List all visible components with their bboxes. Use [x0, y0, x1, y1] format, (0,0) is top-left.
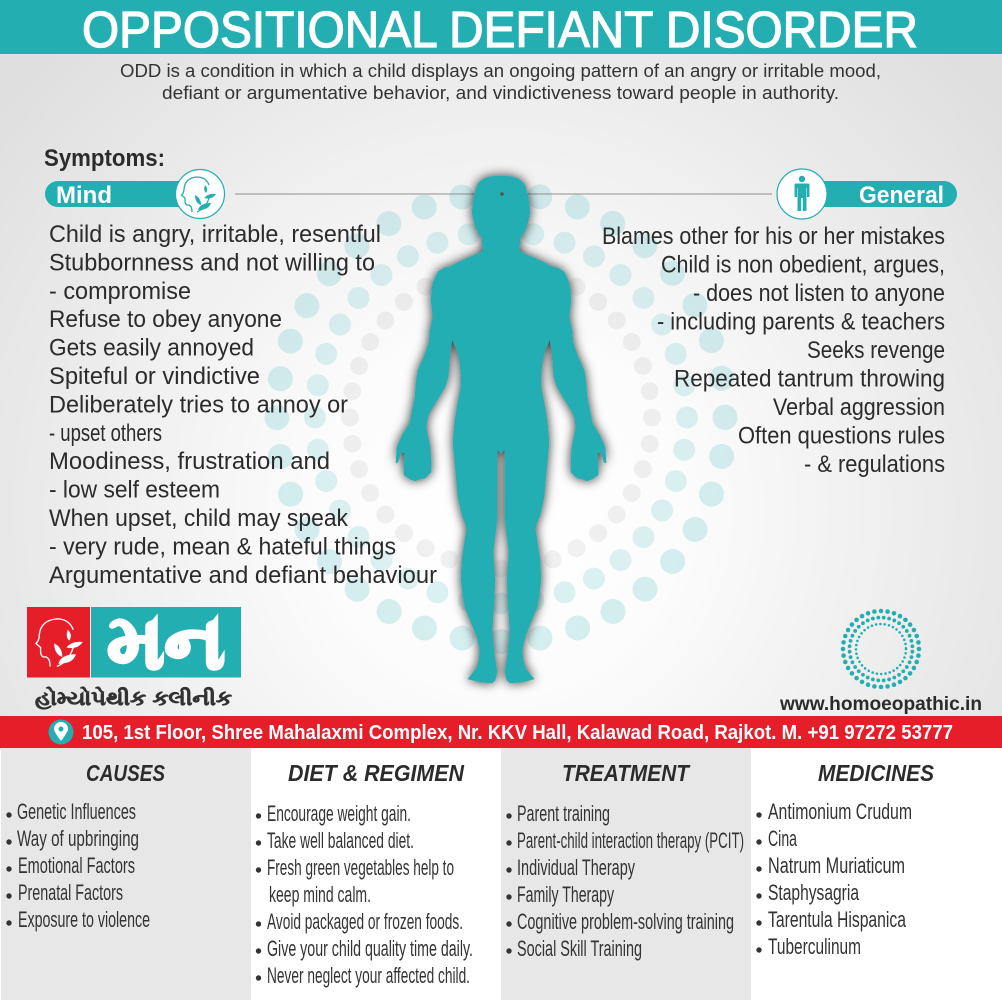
- panel: medicines: Antimonium Crudum: [768, 799, 912, 824]
- mind symptoms list: Moodiness, frustration and: [49, 448, 330, 475]
- mind symptoms list: - very rude, mean & hateful things: [49, 533, 396, 560]
- panel: diet and regimen: keep mind calm.: [269, 882, 371, 907]
- general symptoms list: Often questions rules: [738, 422, 945, 450]
- general symptoms list: Blames other for his or her mistakes: [602, 223, 945, 250]
- mind symptoms list: Child is angry, irritable, resentful: [49, 221, 381, 248]
- panel: medicines: Staphysagria: [768, 880, 860, 905]
- panel: treatment: Cognitive problem-solving training: [517, 909, 734, 934]
- website: www.homoeopathic.in: [779, 694, 982, 715]
- symptoms heading: Symptoms:: [44, 145, 165, 172]
- mind pill: Mind: [56, 182, 112, 209]
- general symptoms list: - including parents & teachers: [657, 308, 945, 336]
- general symptoms list: Child is non obedient, argues,: [661, 252, 945, 278]
- mind pill: [45, 170, 224, 218]
- icon: head with leaves, logo: [36, 619, 83, 666]
- panel: diet and regimen: DIET & REGIMEN: [288, 760, 464, 786]
- panel: medicines: [751, 748, 1002, 1000]
- clinic logo: મન: [107, 600, 225, 685]
- panel: medicines: Tuberculinum: [768, 934, 861, 959]
- panel: treatment: TREATMENT: [562, 760, 691, 786]
- dotted rings behind body: [277, 194, 725, 642]
- panel: causes: Way of upbringing: [17, 826, 139, 851]
- panel: diet and regimen: Encourage weight gain.: [267, 801, 411, 826]
- panel: medicines: Tarentula Hispanica: [768, 907, 907, 932]
- mind symptoms list: Refuse to obey anyone: [49, 306, 282, 333]
- intro text: ODD is a condition in which a child displays an ongoing pattern of an angry or irritable mood,: [120, 61, 881, 81]
- general symptoms list: [602, 223, 945, 478]
- head marker dot: [500, 192, 504, 196]
- intro text: defiant or argumentative behavior, and vindictiveness toward people in authority.: [162, 83, 839, 103]
- general symptoms list: Repeated tantrum throwing: [674, 366, 945, 392]
- panel: causes: [1, 748, 251, 1000]
- mind symptoms list: - low self esteem: [49, 477, 220, 504]
- panel: medicines: Cina: [768, 826, 797, 851]
- mind symptoms list: - compromise: [49, 278, 191, 305]
- intro text: [120, 61, 881, 103]
- mind symptoms list: Gets easily annoyed: [49, 335, 254, 362]
- panel: treatment: Family Therapy: [517, 882, 614, 907]
- mind symptoms list: Spiteful or vindictive: [49, 363, 260, 390]
- general symptoms list: Seeks revenge: [807, 337, 945, 364]
- mind symptoms list: Stubbornness and not willing to: [49, 249, 375, 276]
- title banner: OPPOSITIONAL DEFIANT DISORDER: [82, 1, 918, 58]
- mind symptoms list: [49, 221, 437, 589]
- panel: diet and regimen: Never neglect your affected child.: [267, 963, 470, 988]
- clinic logo: [27, 600, 241, 710]
- mind symptoms list: Argumentative and defiant behaviour: [49, 562, 437, 589]
- panel: diet and regimen: Avoid packaged or frozen foods.: [267, 909, 463, 934]
- mind symptoms list: - upset others: [49, 420, 162, 447]
- icon: person: [777, 169, 827, 219]
- panel: diet and regimen: Fresh green vegetables help to: [267, 855, 454, 880]
- address band: [0, 716, 1002, 748]
- panel: medicines: Natrum Muriaticum: [768, 853, 905, 878]
- panel: diet and regimen: Give your child quality time daily.: [267, 936, 473, 961]
- panel: treatment: Individual Therapy: [517, 855, 635, 880]
- panel: causes: Exposure to violence: [18, 907, 150, 932]
- panel: causes: Emotional Factors: [18, 853, 135, 878]
- clinic logo: હોમ્યોપેથીક કલીનીક: [35, 686, 232, 710]
- icon: head with leaves: [176, 170, 224, 218]
- icon: location pin: [48, 720, 74, 744]
- panel: treatment: [501, 748, 751, 1000]
- panel: treatment: Social Skill Training: [517, 936, 642, 961]
- panel: causes: CAUSES: [86, 760, 166, 786]
- general symptoms list: - & regulations: [804, 451, 945, 478]
- panel: causes: Genetic Influences: [17, 799, 136, 824]
- general pill: [777, 169, 957, 219]
- human body silhouette: [396, 176, 606, 683]
- mind symptoms list: When upset, child may speak: [49, 505, 349, 532]
- address band: 105, 1st Floor, Shree Mahalaxmi Complex, Nr. KKV Hall, Kalawad Road, Rajkot. M. +91 97272 53777: [82, 722, 953, 744]
- panel: causes: Prenatal Factors: [18, 880, 123, 905]
- panel: diet and regimen: Take well balanced diet.: [267, 828, 414, 853]
- panel: diet and regimen: [251, 748, 501, 1000]
- panel: treatment: Parent training: [517, 801, 610, 826]
- panel: medicines: MEDICINES: [818, 760, 935, 786]
- ring logo: [843, 611, 919, 687]
- general pill: General: [859, 182, 944, 209]
- general symptoms list: - does not listen to anyone: [693, 280, 945, 307]
- general symptoms list: Verbal aggression: [773, 394, 945, 421]
- mind symptoms list: Deliberately tries to annoy or: [49, 391, 348, 418]
- background: [0, 0, 1002, 750]
- connector line: [235, 193, 772, 195]
- panel: treatment: Parent-child interaction therapy (PCIT): [517, 828, 744, 853]
